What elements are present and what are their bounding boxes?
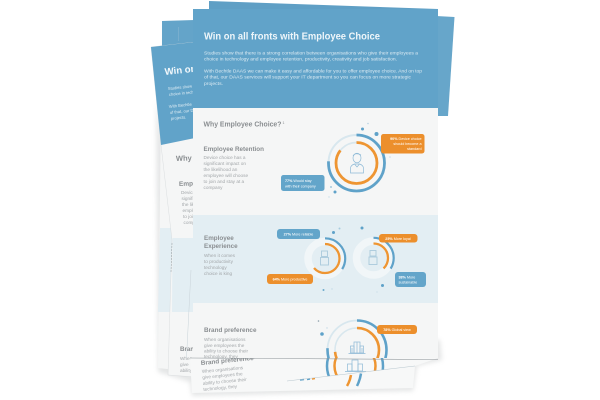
main sheet [193, 9, 438, 380]
section: employee experience text: choice is king [204, 271, 233, 276]
main sheet background [193, 9, 438, 358]
left page text: of that, our DAAS [170, 107, 202, 115]
icon: person [320, 251, 328, 265]
callout: 27% [277, 229, 320, 239]
decorative brand dots [318, 320, 328, 336]
callout: 25% [379, 234, 418, 242]
panel: employee experience band [193, 215, 438, 303]
callout: 90%: should become a [393, 142, 422, 146]
callout: 27%: 27% More reliable [284, 232, 313, 236]
left page text: Why Employee [176, 152, 229, 163]
icon: building [345, 360, 366, 372]
left page text: With Bechtle DAAS [169, 100, 204, 109]
icon: person [369, 250, 377, 264]
soft shadows under the stack [156, 100, 442, 396]
callout: 78%: 78% Global view [383, 328, 411, 332]
callout: 38% [395, 272, 426, 287]
sheet behind: far left [158, 20, 195, 372]
callout: 25%: 25% More loyal [385, 237, 411, 241]
left page text: the likelihood [182, 202, 210, 207]
front curled sheet [190, 358, 437, 393]
section: brand preference text: Brand preference [204, 327, 257, 334]
section: employee experience text: to productivity [204, 259, 234, 264]
section: employee retention text: the likelihood an [204, 167, 238, 172]
icon: person [350, 153, 364, 173]
left page text: to join [183, 214, 196, 219]
callout: 77% [281, 175, 324, 191]
intro text: With Bechtle DAAS we can make it easy and affordable for you to offer employee choice. And on top [204, 68, 423, 74]
callout: 90% [381, 134, 424, 154]
chart: brand preference rings [318, 319, 388, 358]
left page text: Brand [180, 346, 198, 353]
section: employee retention text: significant impact on [204, 161, 246, 166]
section: employee experience text: technology [204, 265, 227, 270]
intro text: of that, our DAAS services will support your IT department so you can focus on more strategic [204, 74, 411, 80]
section: employee retention text: company [204, 185, 223, 190]
left page blue header [151, 42, 195, 145]
decorative experience dots [322, 226, 384, 293]
callout: 38%: 38% More [398, 276, 415, 280]
intro text: projects. [204, 81, 223, 86]
left page text: Win on all fronts [164, 59, 240, 78]
chart: left experience ring [305, 238, 345, 279]
sheet behind: rotated left page [150, 42, 193, 377]
heading: why employee choice: 1 [281, 120, 285, 125]
section: employee retention text: Device choice has a [204, 155, 246, 160]
front sheet text: give employees the [202, 371, 243, 380]
section: employee retention text [204, 146, 264, 190]
section: employee retention text: to join and stay at a [204, 179, 245, 184]
callout: 77%: 77% Would stay [285, 179, 312, 183]
left page text: choice in technology [169, 88, 207, 97]
section: brand preference text: ability to choose their [204, 348, 248, 354]
section: brand preference text: give employees the [204, 343, 245, 348]
front sheet text [201, 358, 254, 391]
intro text [204, 50, 423, 86]
main sheet bottom edge [190, 358, 438, 360]
left page text: Device [181, 190, 196, 195]
front sheet upper ring fragment [326, 358, 384, 376]
left page text: ability [180, 368, 193, 373]
title: Win on all fronts with Employee Choice [204, 32, 381, 42]
intro text: Studies show that there is a strong correlation between organisations who give their employees a [204, 50, 419, 56]
sheet behind: right edge [436, 16, 454, 116]
left page experience band [172, 238, 195, 312]
callout: 64%: 64% More productive [273, 278, 307, 282]
section: employee experience text: Employee [204, 235, 234, 242]
section: brand preference text [204, 327, 257, 359]
left page text: When [180, 356, 193, 361]
icon: building [348, 342, 366, 354]
callout: 64% [267, 274, 313, 284]
sheet behind: top edge [209, 1, 438, 40]
left page text: give [180, 362, 189, 367]
callout: 78% [377, 325, 417, 334]
callout: 90%: standard [407, 147, 422, 151]
chart: retention rings [328, 123, 391, 198]
section: employee experience text: When it comes [204, 253, 236, 258]
section: employee retention text: employee will choose [204, 173, 248, 178]
decorative data dots [328, 123, 391, 198]
left page text [164, 66, 193, 373]
callout: 77%: with their company [285, 184, 316, 188]
heading: why employee choice: Why Employee Choice? [204, 120, 290, 128]
section: brand preference text: When organisations [204, 337, 246, 342]
main header panel [193, 9, 438, 108]
front sheet text: Brand preference [201, 355, 254, 367]
callout: 90%: 90% Device choice [390, 137, 422, 141]
left page text: Employee [179, 180, 210, 188]
left page text: employee [182, 208, 203, 213]
section: employee experience text: Experience [204, 243, 238, 250]
front sheet lower ring fragment [300, 374, 361, 386]
front sheet text: ability to choose their [203, 377, 247, 386]
callout: 38%: sustainable [398, 280, 417, 284]
front sheet text: technology, they [203, 384, 238, 392]
section: employee experience text [204, 235, 238, 276]
chart: right experience ring [353, 238, 394, 278]
section: brand preference text: technology, they [204, 354, 238, 359]
front sheet text: When organisations [202, 365, 244, 374]
left page text: company [184, 220, 203, 225]
left page text: significant [182, 196, 203, 201]
intro text: choice in technology and employee retention, productivity, creativity and job satisfaction. [204, 56, 397, 62]
front sheet background [190, 358, 438, 393]
left page text: projects. [171, 114, 187, 121]
left page text: Studies show that [168, 83, 201, 91]
section: employee retention text: Employee Retention [204, 146, 264, 153]
